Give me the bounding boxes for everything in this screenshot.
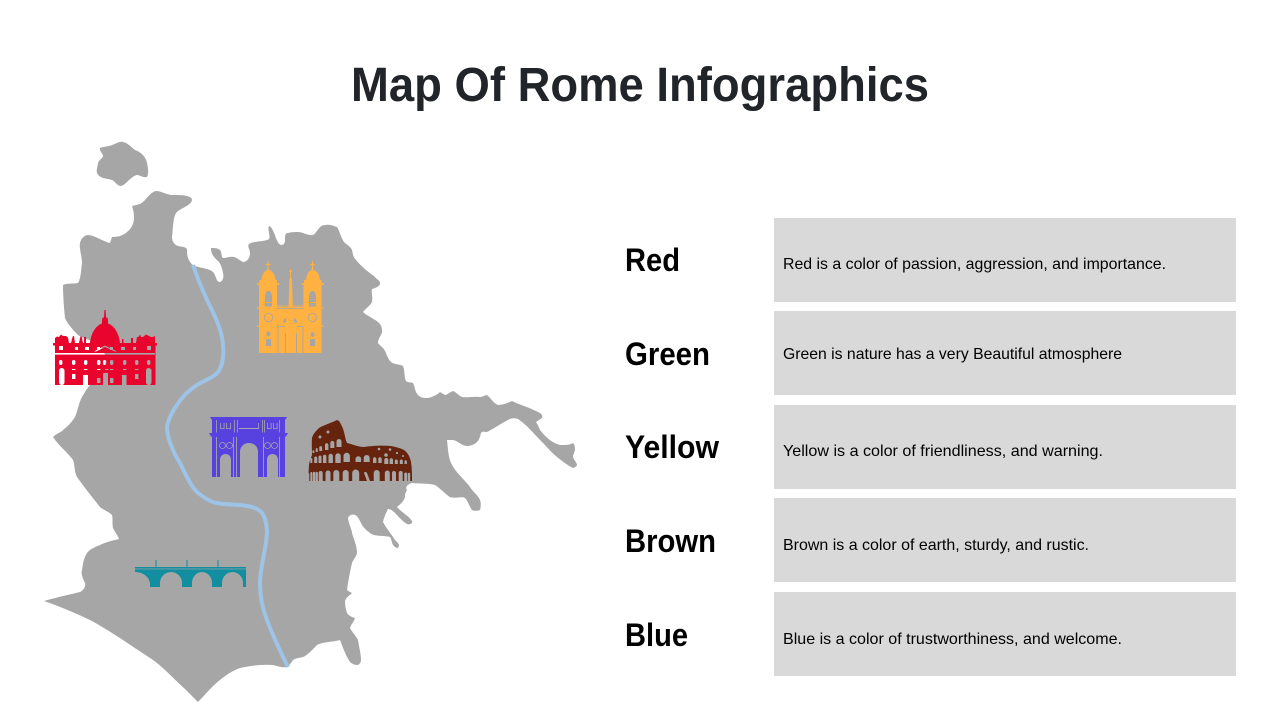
arch: lower body [212,436,285,477]
row: Green [625,311,1236,395]
row: Blue [625,592,1236,676]
text: Red description: Red is a color of passion, aggression, and importance. [783,256,1166,273]
arch: middle cornice [209,433,288,436]
label: Blue: Blue [625,617,688,653]
map: northern island [97,142,148,186]
panel: Yellow description [774,405,1236,489]
map: main territory [44,191,577,702]
icon: brown colosseum [308,420,412,481]
row: Yellow [625,405,1236,489]
icon: red basilica [53,310,157,385]
panel: Blue description [774,592,1236,676]
right tower [302,261,324,353]
icon: yellow church [257,261,324,353]
title: Map Of Rome Infographics [351,59,929,112]
centre facade [277,306,304,353]
label: Brown: Brown [625,523,716,559]
row: Brown [625,498,1236,582]
arch: upper cornice [210,417,287,420]
icon: teal bridge [135,560,246,587]
icon: blue triumphal arch [209,417,288,477]
text: Green description: Green is nature has a very Beautiful atmosphere [783,346,1122,363]
text: Yellow description: Yellow is a color of friendliness, and warning. [783,443,1103,460]
left tower [257,261,280,353]
label: Red: Red [625,242,680,278]
text: Brown description: Brown is a color of earth, sturdy, and rustic. [783,537,1089,554]
panel: Red description [774,218,1236,302]
text: Blue description: Blue is a color of trustworthiness, and welcome. [783,631,1122,648]
map of Rome [44,142,577,702]
panel: Brown description [774,498,1236,582]
panel: Green description [774,311,1236,395]
river Tiber [167,265,288,667]
arch: attic [212,419,285,434]
label: Yellow: Yellow [625,429,719,465]
obelisk [285,269,297,333]
row: Red [625,218,1236,302]
label: Green: Green [625,336,710,372]
